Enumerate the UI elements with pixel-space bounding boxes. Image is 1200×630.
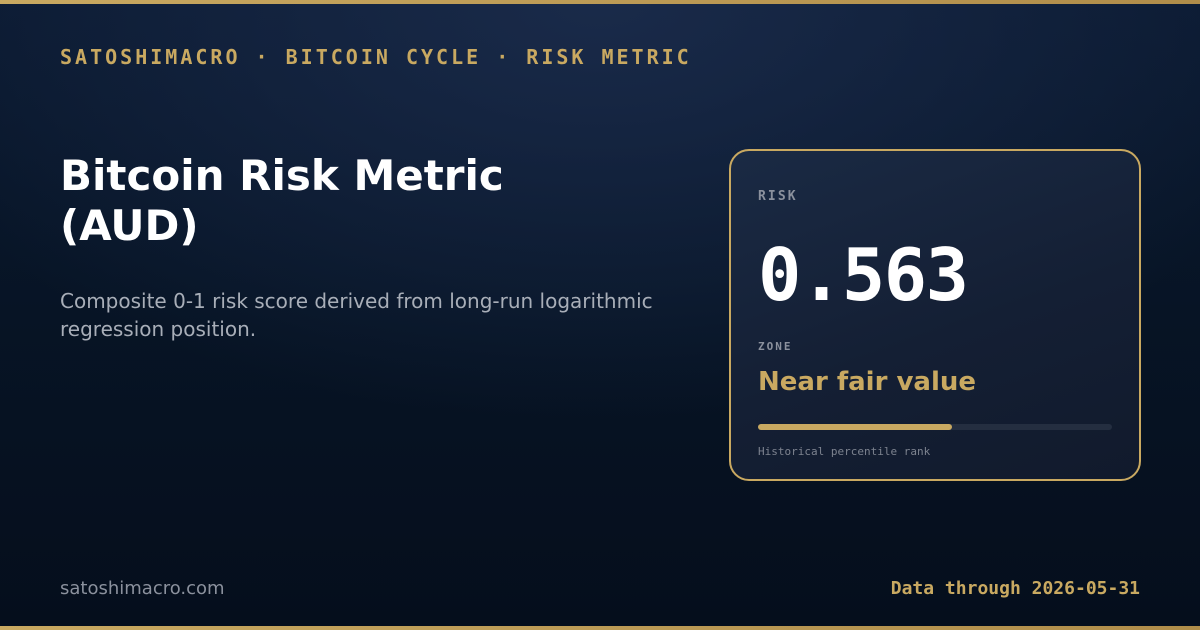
zone label: ZONE <box>758 340 792 353</box>
description <box>60 289 653 341</box>
description: regression position. <box>60 317 256 341</box>
percentile bar <box>758 424 1112 430</box>
percentile caption: Historical percentile rank <box>758 445 930 458</box>
panel: risk card <box>729 149 1141 481</box>
footer site: satoshimacro.com <box>60 578 225 599</box>
bottom accent bar <box>0 626 1200 630</box>
title <box>60 151 504 250</box>
description: Composite 0-1 risk score derived from long-run logarithmic <box>60 289 653 313</box>
risk label: RISK <box>758 189 798 204</box>
footer date: Data through 2026-05-31 <box>891 578 1140 599</box>
title: Bitcoin Risk Metric <box>60 151 504 200</box>
eyebrow header: SATOSHIMACRO · BITCOIN CYCLE · RISK METRIC <box>60 45 692 69</box>
risk value: 0.563 <box>758 233 968 317</box>
top accent bar <box>0 0 1200 4</box>
zone value: Near fair value <box>758 367 976 397</box>
percentile fill <box>758 424 952 430</box>
title: (AUD) <box>60 201 199 250</box>
